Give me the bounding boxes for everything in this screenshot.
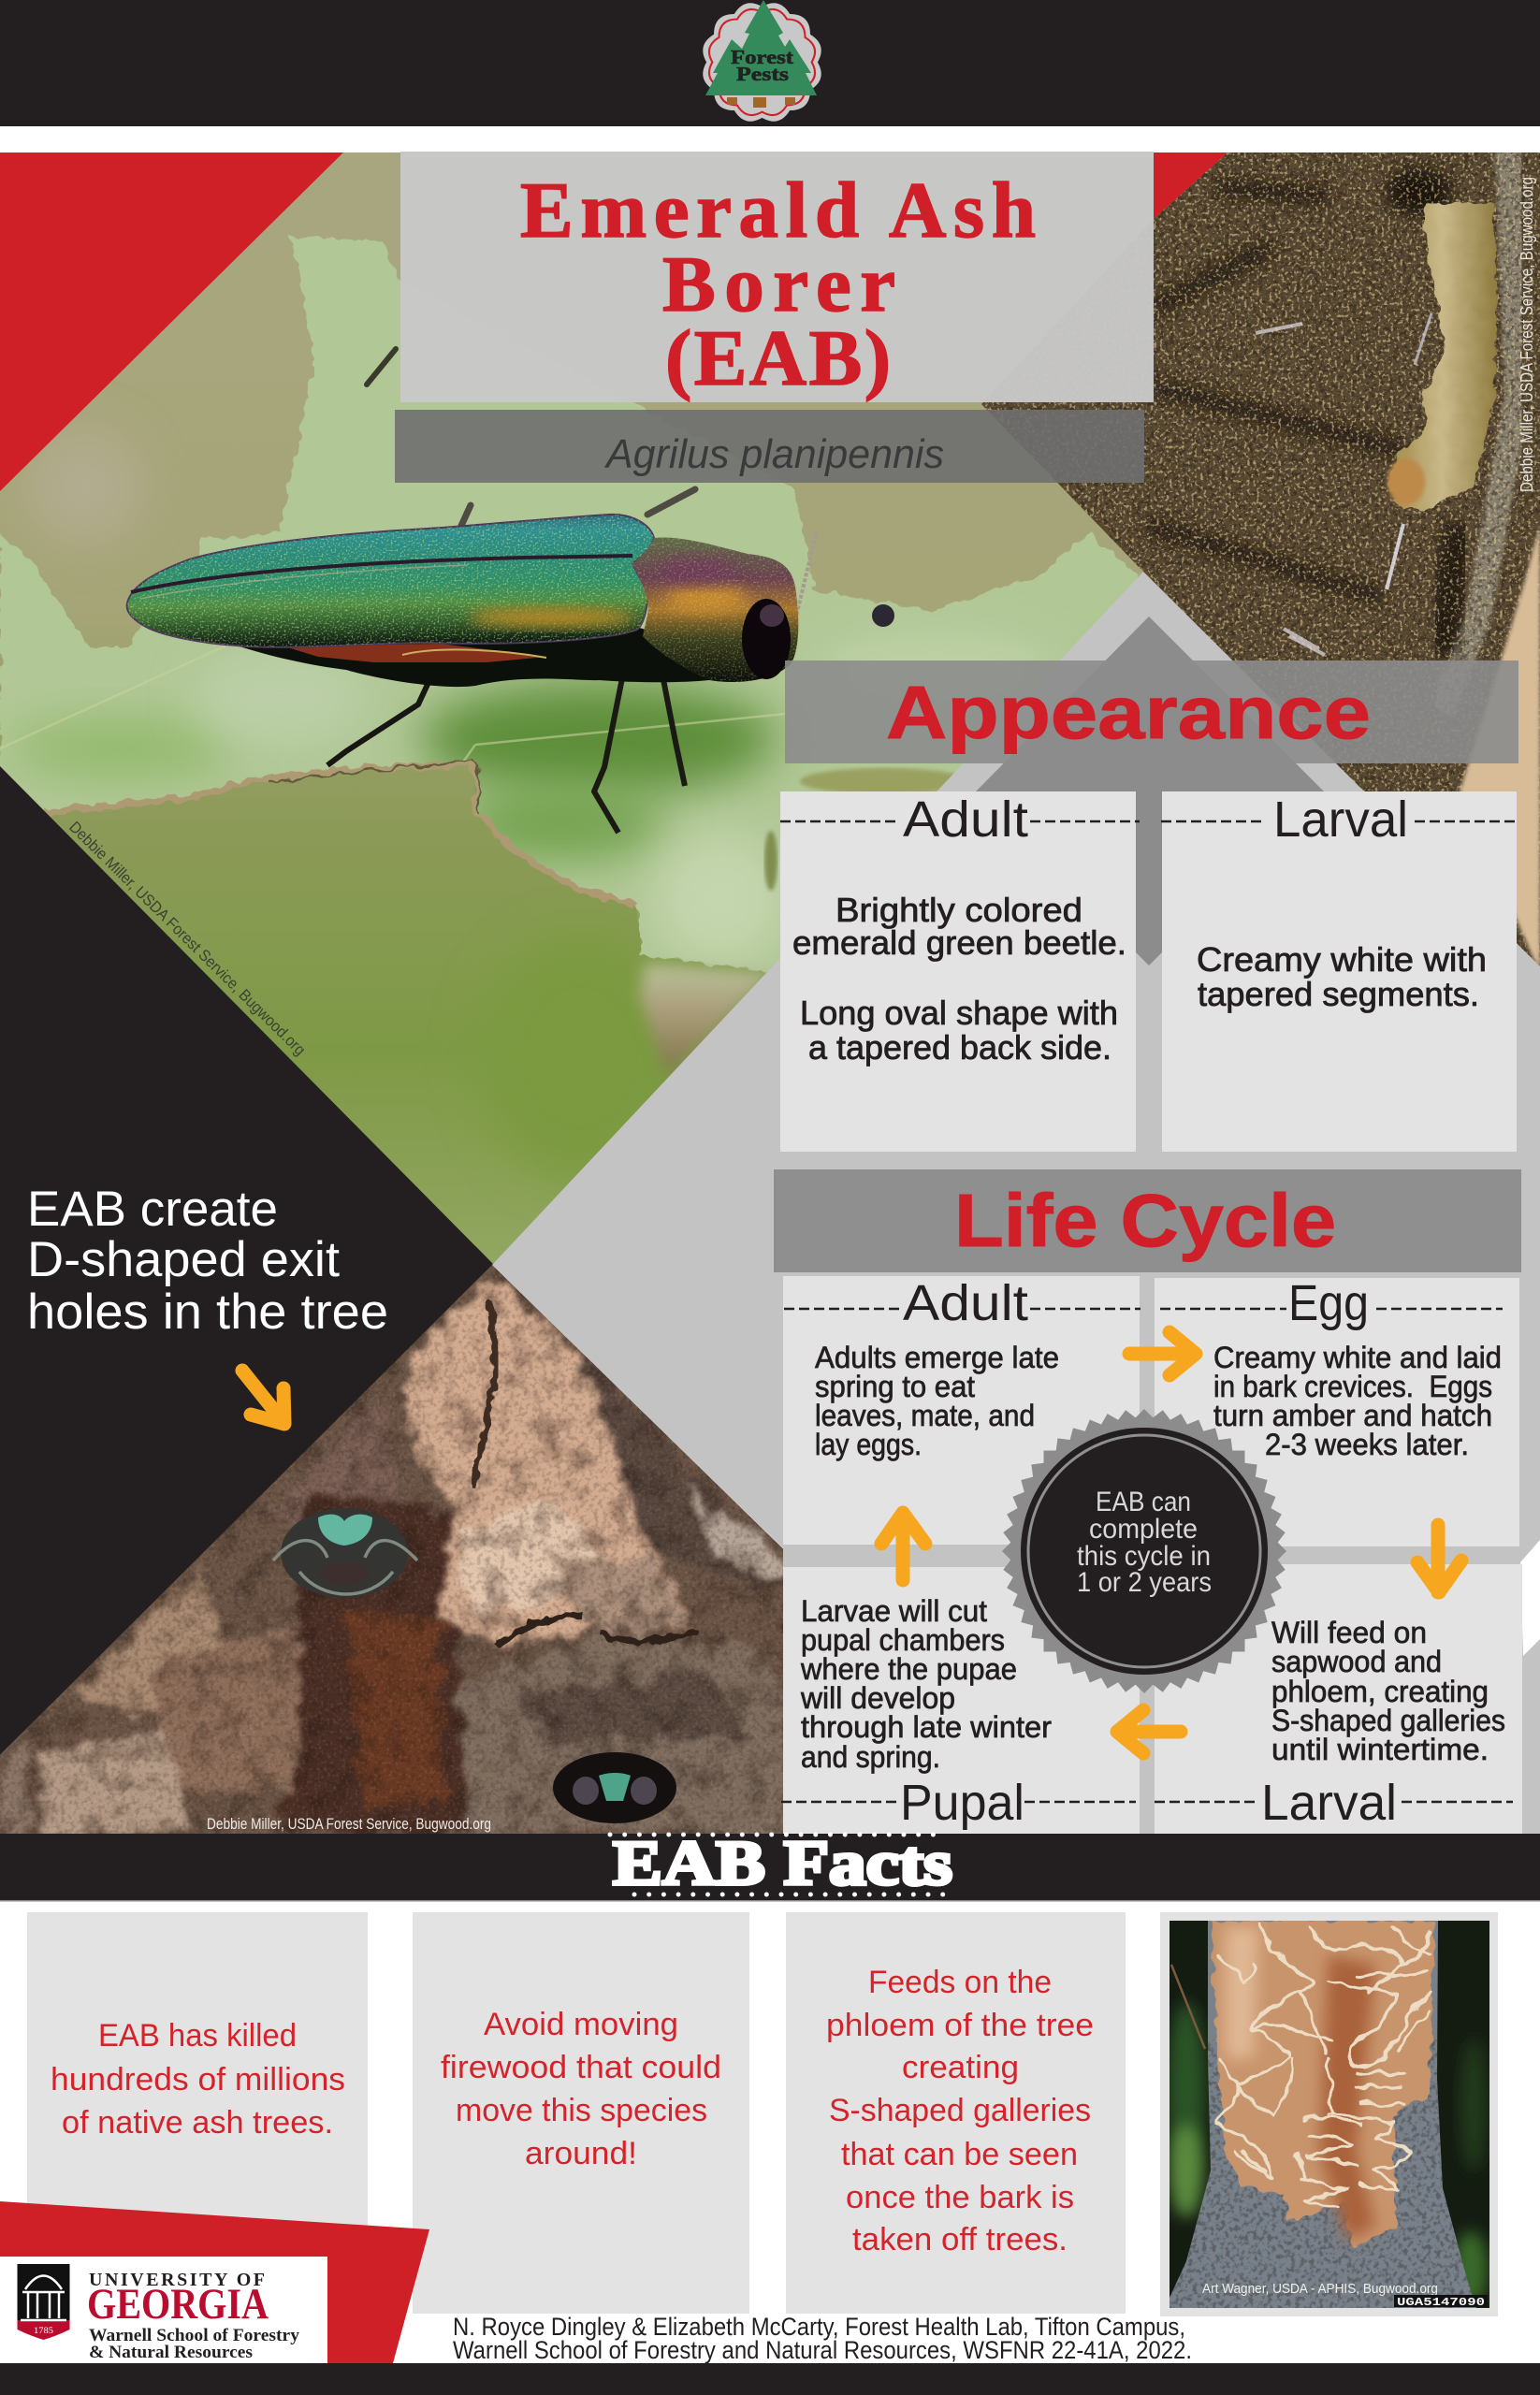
photo: larva in gallery xyxy=(973,150,1540,973)
photo credit: adult beetle: Debbie Miller, USDA Forest Service, Bugwood.org xyxy=(65,818,309,1059)
icon: Forest Pests badge: Pests xyxy=(736,63,789,85)
larval stage text: Will feed on xyxy=(1271,1616,1427,1649)
panel: life cycle larval: Larval xyxy=(1261,1775,1397,1831)
fact card: galleries: once the bark is xyxy=(846,2180,1074,2215)
callout: D-shaped exit holes: holes in the tree xyxy=(27,1285,388,1340)
heading band: Appearance: Appearance xyxy=(886,671,1371,754)
egg stage text: turn amber and hatch xyxy=(1213,1399,1492,1432)
larval stage text: S-shaped galleries xyxy=(1271,1704,1505,1737)
photo credit: tree: Art Wagner, USDA - APHIS, Bugwood.org xyxy=(1202,2281,1438,2297)
egg stage text xyxy=(1213,1341,1502,1461)
fact card: trees killed xyxy=(27,1912,368,2235)
arrow: adult to egg xyxy=(1129,1332,1196,1375)
EAB Facts band xyxy=(0,1827,1540,1901)
fact card: galleries xyxy=(786,1912,1126,2314)
fact card: galleries: Feeds on the xyxy=(868,1965,1052,2000)
adult stage text xyxy=(815,1341,1059,1461)
fact card: galleries: taken off trees. xyxy=(852,2222,1068,2257)
fact card: firewood xyxy=(413,1912,749,2314)
subtitle band: scientific name: Agrilus planipennis xyxy=(603,431,944,477)
top black header bar xyxy=(0,0,1540,126)
title: Borer xyxy=(662,240,895,328)
adult stage text: lay eggs. xyxy=(815,1428,922,1461)
panel: appearance larval: Larval xyxy=(1273,791,1408,848)
title xyxy=(520,167,1036,402)
pupal stage text xyxy=(800,1594,1052,1774)
fact card: galleries: phloem of the tree xyxy=(826,2008,1094,2043)
adult beetle xyxy=(122,489,817,833)
panel: appearance larval xyxy=(1161,791,1518,1152)
arrow: pointing to exit holes xyxy=(242,1371,284,1424)
University of Georgia logo xyxy=(0,2257,327,2363)
image number tag xyxy=(1394,2295,1488,2309)
icon: UGA arch shield xyxy=(17,2264,69,2340)
emerging beetle upper xyxy=(273,1508,417,1598)
adult stage text: Adults emerge late xyxy=(815,1341,1059,1374)
center badge: cycle duration: this cycle in xyxy=(1077,1541,1211,1572)
larval stage text xyxy=(1271,1616,1505,1766)
heading band: Life Cycle: Life Cycle xyxy=(954,1179,1336,1262)
panel: life cycle egg: Egg xyxy=(1288,1275,1369,1331)
photo card: S-shaped galleries on trunk xyxy=(1160,1912,1498,2316)
photo: exit holes in bark xyxy=(0,1263,805,1836)
pupal stage text: where the pupae xyxy=(800,1652,1017,1686)
larval appearance text xyxy=(1197,940,1487,1013)
authors and publication credit: N. Royce Dingley & Elizabeth McCarty, Forest Health Lab, Tifton Campus, xyxy=(453,2313,1185,2341)
icon: UGA arch shield: 1785 xyxy=(34,2326,54,2335)
black diagonal panel xyxy=(0,766,494,1755)
fact card: trees killed: hundreds of millions xyxy=(51,2062,345,2097)
fact card: firewood: Avoid moving xyxy=(484,2007,678,2042)
authors and publication credit xyxy=(453,2313,1192,2364)
fact card: galleries: creating xyxy=(902,2050,1019,2085)
panel: life cycle adult: Adult xyxy=(903,1275,1028,1331)
photo credit: bark: Debbie Miller, USDA Forest Service, Bugwood.org xyxy=(207,1816,491,1833)
adult appearance text: emerald green beetle. xyxy=(792,923,1126,962)
title panel xyxy=(400,152,1154,402)
pupal stage text: pupal chambers xyxy=(801,1623,1005,1657)
center badge: cycle duration: 1 or 2 years xyxy=(1077,1567,1212,1598)
photo credit: larva: Debbie Miller, USDA Forest Service, Bugwood.org xyxy=(1518,177,1536,492)
pupal stage text: and spring. xyxy=(801,1740,940,1774)
University of Georgia logo: & Natural Resources xyxy=(89,2343,253,2362)
title: Emerald Ash xyxy=(520,167,1036,254)
callout: D-shaped exit holes xyxy=(27,1182,388,1340)
larval appearance text: tapered segments. xyxy=(1198,975,1479,1013)
icon: Forest Pests badge: Forest xyxy=(731,46,793,68)
center badge: cycle duration xyxy=(1002,1409,1286,1693)
fact card: firewood: around! xyxy=(525,2136,637,2171)
larval stage text: phloem, creating xyxy=(1271,1675,1489,1708)
callout: D-shaped exit holes: D-shaped exit xyxy=(27,1232,340,1287)
authors and publication credit: Warnell School of Forestry and Natural Resources, WSFNR 22-41A, 2022. xyxy=(453,2336,1192,2364)
University of Georgia logo: Warnell School of Forestry xyxy=(89,2326,300,2345)
leaf xyxy=(0,236,1143,973)
panel: life cycle pupal: Pupal xyxy=(900,1775,1024,1831)
EAB Facts band: EAB Facts xyxy=(613,1827,952,1898)
fact card: galleries: S-shaped galleries xyxy=(829,2093,1091,2128)
photo: adult beetle on leaf xyxy=(0,152,1216,1275)
adult appearance text xyxy=(792,891,1126,1067)
fact card: firewood: firewood that could xyxy=(441,2050,721,2085)
heading band: Life Cycle xyxy=(774,1169,1521,1272)
larval stage text: sapwood and xyxy=(1271,1645,1442,1678)
adult stage text: spring to eat xyxy=(815,1370,975,1403)
panel: life cycle adult xyxy=(783,1275,1140,1545)
panel: life cycle egg xyxy=(1155,1275,1519,1546)
adult stage text: leaves, mate, and xyxy=(815,1399,1035,1432)
pupal stage text: through late winter xyxy=(801,1710,1052,1744)
bottom black bar xyxy=(0,2363,1540,2395)
pupal stage text: Larvae will cut xyxy=(801,1594,987,1628)
egg stage text: Creamy white and laid xyxy=(1213,1341,1502,1374)
larva body xyxy=(1387,201,1497,509)
panel: appearance adult xyxy=(780,791,1140,1152)
red corner triangle left xyxy=(0,152,343,491)
fact card: galleries: that can be seen xyxy=(841,2137,1078,2172)
icon: Forest Pests badge xyxy=(703,0,821,122)
light grey diamond background xyxy=(492,572,1540,1834)
arrow: egg to larval xyxy=(1417,1525,1461,1592)
larval stage text: until wintertime. xyxy=(1271,1733,1489,1766)
red corner triangle right xyxy=(1154,152,1228,219)
fact card: trees killed: EAB has killed xyxy=(98,2018,297,2054)
panel: appearance adult: Adult xyxy=(903,791,1028,848)
arrow: pupal to adult xyxy=(881,1513,925,1580)
D-shaped exit hole with beetle xyxy=(553,1752,676,1823)
adult appearance text: Brightly colored xyxy=(835,891,1082,929)
University of Georgia logo: UNIVERSITY OF xyxy=(89,2270,265,2290)
center badge: cycle duration: EAB can xyxy=(1096,1487,1191,1517)
fact card: firewood: move this species xyxy=(456,2093,707,2128)
title: (EAB) xyxy=(665,314,891,402)
panel: life cycle pupal xyxy=(781,1567,1140,1834)
red logo backing shape xyxy=(0,2201,429,2363)
adult appearance text: a tapered back side. xyxy=(808,1028,1111,1067)
arrow: larval to pupal xyxy=(1117,1710,1181,1753)
callout: D-shaped exit holes: EAB create xyxy=(27,1182,278,1237)
heading band: Appearance xyxy=(785,660,1518,763)
subtitle band: scientific name xyxy=(395,410,1144,483)
adult appearance text: Long oval shape with xyxy=(800,994,1118,1032)
University of Georgia logo: GEORGIA xyxy=(87,2280,269,2329)
center badge: cycle duration: complete xyxy=(1089,1514,1198,1545)
larval appearance text: Creamy white with xyxy=(1197,940,1487,979)
image number tag: UGA5147090 xyxy=(1397,2296,1485,2309)
egg stage text: 2-3 weeks later. xyxy=(1265,1428,1469,1461)
dark grey arrow shape xyxy=(976,617,1324,965)
pupal stage text: will develop xyxy=(800,1681,955,1715)
fact card: trees killed: of native ash trees. xyxy=(62,2105,333,2141)
panel: life cycle larval xyxy=(1155,1564,1522,1834)
egg stage text: in bark crevices. Eggs xyxy=(1213,1370,1492,1403)
